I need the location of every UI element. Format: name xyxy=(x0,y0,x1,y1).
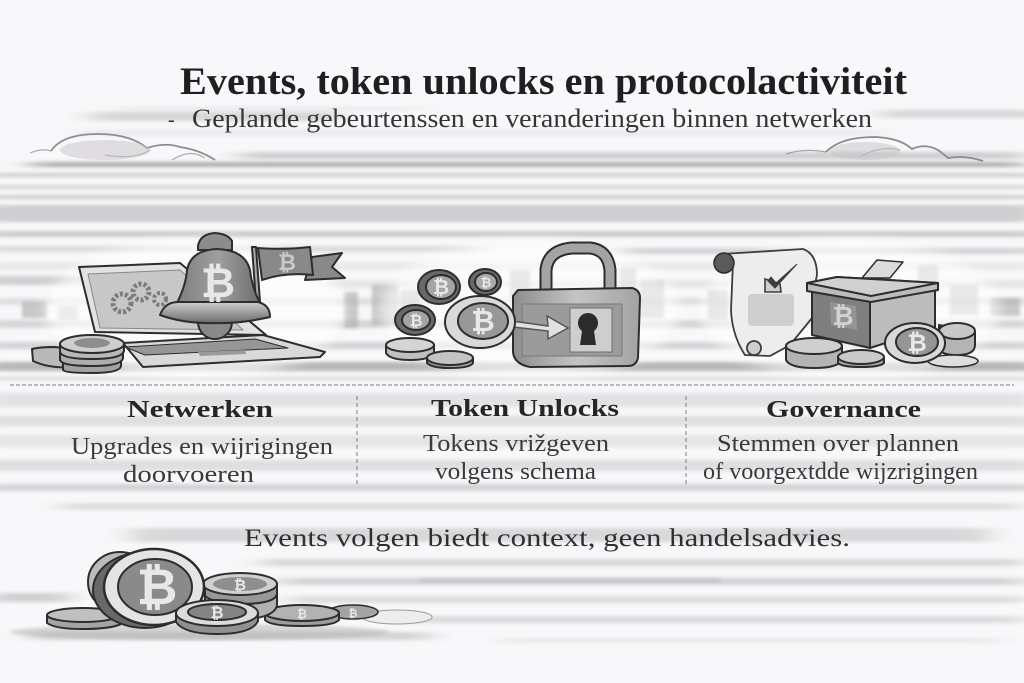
heading: Token Unlocks: Token Unlocks xyxy=(431,396,619,422)
scroll xyxy=(714,249,817,356)
column: Token Unlocks xyxy=(423,396,619,485)
coin stack xyxy=(32,335,124,373)
illustration: padlock and coins: ₿ xyxy=(433,277,449,299)
flag: ₿ xyxy=(278,250,296,275)
background skyline xyxy=(22,265,1020,582)
illustration: coin pile: ₿ xyxy=(210,604,224,622)
title: Events, token unlocks en protocolactiviteit xyxy=(180,60,907,103)
gears xyxy=(113,284,166,312)
text: Governance description xyxy=(703,431,978,485)
text: Token Unlocks description: Tokens vrižgeven xyxy=(423,431,609,457)
text: Netwerken description xyxy=(71,434,333,488)
laptop xyxy=(79,263,325,367)
heading: Netwerken: Netwerken xyxy=(127,397,273,423)
illustration: coin pile: ₿ xyxy=(297,607,307,621)
illustration: coin pile: ₿ xyxy=(349,608,358,620)
text: Governance description: of voorgextdde wijzrigingen xyxy=(703,459,978,485)
illustration: padlock and coins: ₿ xyxy=(471,306,495,338)
column divider xyxy=(685,396,687,486)
coins xyxy=(786,323,978,368)
bell: ₿ xyxy=(201,259,235,306)
icon: cloud left xyxy=(30,134,215,160)
illustration: scroll, ballot box and coins: ₿ xyxy=(832,301,854,331)
text: Token Unlocks description xyxy=(423,431,609,485)
column: Netwerken xyxy=(71,397,333,488)
flag xyxy=(252,247,345,302)
illustration: padlock and coins: ₿ xyxy=(481,275,491,290)
lock body xyxy=(513,288,640,367)
shackle xyxy=(546,248,610,292)
illustration: laptop, bell and flag xyxy=(32,233,345,380)
column divider xyxy=(356,396,358,486)
illustration: coin pile: ₿ xyxy=(234,577,246,594)
text: Governance description: Stemmen over plannen xyxy=(717,431,959,457)
icon: cloud right xyxy=(786,137,983,161)
ballot box xyxy=(807,260,938,348)
background streaks xyxy=(0,107,1024,643)
illustration: coin pile xyxy=(10,549,432,640)
bell xyxy=(160,233,270,339)
column: Governance xyxy=(703,397,978,485)
text: Netwerken description: doorvoeren xyxy=(123,462,254,488)
heading: Governance: Governance xyxy=(766,397,921,423)
footer note: Events volgen biedt context, geen handelsadvies. xyxy=(244,525,850,552)
dashed divider xyxy=(10,384,1014,386)
keyhole xyxy=(578,313,598,345)
subtitle: Geplande gebeurtenssen en veranderingen binnen netwerken xyxy=(192,104,872,133)
coins xyxy=(386,269,515,368)
illustration: padlock and coins: ₿ xyxy=(409,312,423,330)
text: Netwerken description: Upgrades en wijrigingen xyxy=(71,434,333,460)
illustration: scroll, ballot box and coins: ₿ xyxy=(907,330,927,357)
illustration: scroll, ballot box and coins xyxy=(700,240,1000,380)
text: Token Unlocks description: volgens schema xyxy=(435,459,596,485)
illustration: padlock and coins xyxy=(380,240,680,380)
subtitle: - xyxy=(168,109,175,131)
arrow xyxy=(512,316,568,339)
illustration: coin pile: ₿ xyxy=(137,559,177,615)
